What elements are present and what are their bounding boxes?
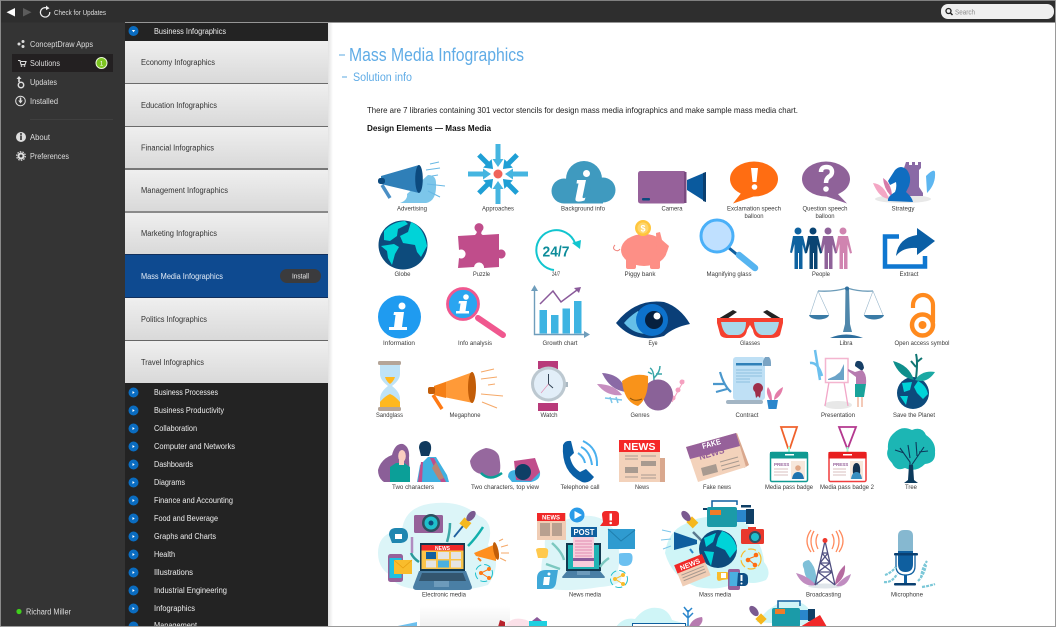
illustration: News media	[536, 508, 635, 598]
list header: Business Infographics	[128, 26, 226, 36]
user status: Richard Miller: Richard Miller	[26, 608, 71, 616]
list row: Management	[128, 621, 198, 627]
icon: Broadcasting	[796, 530, 851, 598]
list item: Travel Infographics	[125, 341, 328, 383]
camcorder	[703, 501, 754, 527]
icon: Approaches: Approaches	[482, 206, 515, 212]
laptop: NEWS	[435, 546, 451, 552]
icon: Advertising: Advertising	[397, 206, 427, 212]
list row: Industrial Engineering: Industrial Engineering	[154, 586, 227, 595]
icon: Megaphone	[428, 369, 503, 419]
list row: Business Productivity: Business Productivity	[154, 406, 224, 415]
icon: Camera: Camera	[662, 206, 683, 212]
microphone	[454, 509, 478, 537]
list item: Education Infographics	[125, 84, 328, 127]
icon: Two characters, top view: Two characters, top view	[471, 484, 539, 491]
nav item: ConceptDraw Apps: ConceptDraw Apps	[30, 40, 93, 49]
icon: Microphone: Microphone	[891, 592, 923, 598]
icon: Two characters: Two characters	[392, 484, 435, 491]
search box: Search	[955, 8, 975, 16]
camera	[414, 514, 443, 533]
icon: Libra	[809, 286, 884, 347]
icon: Exclamation speech balloon: balloon	[744, 213, 764, 220]
thumbs up bubble	[389, 528, 408, 543]
list row: Health: Health	[154, 550, 175, 559]
list row: Business Processes	[128, 388, 218, 398]
list item: Management Infographics	[125, 170, 328, 213]
icon: Media pass badge: Media pass badge	[765, 484, 813, 491]
caption: News media	[569, 592, 601, 598]
icon: Sandglass: Sandglass	[376, 412, 404, 419]
nav item: Preferences: Preferences	[30, 152, 69, 161]
leaves	[546, 543, 609, 569]
caption: Mass media	[699, 592, 731, 598]
microphone	[679, 509, 703, 542]
red camera	[741, 527, 764, 544]
icon: Media pass badge	[765, 427, 813, 491]
icon: Eye	[616, 301, 690, 347]
list header: Business Infographics: Business Infographics	[154, 27, 226, 36]
icon: Tree: Tree	[905, 484, 917, 491]
icon: 24/7: 24/7	[552, 271, 560, 278]
icon: Fake news: Fake news	[703, 484, 732, 491]
list item: Travel Infographics: Travel Infographics	[141, 358, 204, 367]
button: Check for Updates	[40, 6, 106, 17]
laptop with post	[562, 537, 605, 578]
intro paragraph: There are 7 libraries containing 301 vector stencils for design mass media infographics and make sample mass media chart.	[367, 105, 798, 115]
list item: Financial Infographics	[125, 127, 328, 170]
list row: Diagrams: Diagrams	[154, 478, 185, 487]
search box	[941, 4, 1054, 19]
icon: Puzzle	[458, 223, 506, 278]
list item: Marketing Infographics: Marketing Infographics	[141, 229, 217, 238]
icon: Media pass badge 2	[820, 427, 874, 491]
nav selected row: Solutions	[12, 54, 113, 72]
list row: Food and Beverage: Food and Beverage	[154, 514, 218, 523]
icon: Presentation	[810, 350, 866, 419]
nav item: Solutions: Solutions	[30, 59, 60, 68]
list row: Infographics	[128, 604, 195, 614]
icon: forward arrow	[23, 8, 32, 16]
megaphone	[474, 539, 509, 561]
icon: back arrow	[6, 8, 15, 16]
icon: Presentation: Presentation	[821, 412, 855, 419]
icon: Globe: Globe	[394, 271, 411, 278]
icon: Magnifying glass: Magnifying glass	[706, 271, 752, 278]
list item: Education Infographics: Education Infographics	[141, 101, 217, 110]
icon: Extract	[885, 228, 935, 278]
share icon	[610, 570, 628, 588]
icon: Two characters	[378, 441, 449, 491]
nav item: Installed: Installed	[30, 97, 58, 106]
phone and mail	[388, 554, 412, 582]
chart icon: Growth chart: Growth chart	[542, 340, 578, 347]
icon: Background info: Background info	[561, 206, 605, 212]
megaphone	[661, 530, 697, 553]
leaves	[411, 523, 483, 562]
icon: Fake news: NEWS	[698, 445, 726, 462]
icon: Approaches	[468, 144, 528, 212]
blue bubble	[619, 553, 633, 566]
section heading: Design Elements — Mass Media: Design Elements — Mass Media	[367, 123, 491, 133]
list item: Economy Infographics	[125, 41, 328, 84]
list item: Politics Infographics: Politics Infographics	[141, 315, 207, 324]
icon: Watch	[531, 361, 568, 419]
nav item: Preferences	[17, 152, 69, 161]
play button	[570, 508, 584, 522]
icon: Camera	[638, 171, 706, 212]
alert bubble	[600, 511, 619, 526]
icon: Question speech balloon	[802, 162, 850, 220]
icon: Piggy bank	[614, 220, 669, 278]
icon: Watch: Watch	[540, 412, 558, 419]
list row: Infographics: Infographics	[154, 604, 195, 613]
post label: POST	[574, 528, 595, 537]
list item selected: Mass Media Infographics	[125, 254, 328, 298]
list item: Financial Infographics: Financial Infographics	[141, 144, 214, 152]
next row: partially visible illustrations	[393, 601, 827, 627]
icon: Microphone	[884, 530, 935, 598]
list row: Illustrations: Illustrations	[154, 568, 193, 577]
list item: Management Infographics: Management Infographics	[141, 186, 228, 195]
icon: Open access symbol	[894, 295, 950, 347]
illustration: Electronic media	[378, 503, 509, 598]
icon: Genres	[597, 366, 684, 419]
thumb bubble	[717, 572, 730, 581]
icon: Contract: Contract	[736, 412, 759, 419]
nav item: About: About	[30, 133, 51, 142]
icon: Megaphone: Megaphone	[450, 412, 481, 419]
icon: Information: Information	[383, 340, 415, 347]
icon: Exclamation speech balloon: Exclamation speech	[727, 206, 781, 212]
icon: Save the Planet: Save the Planet	[893, 412, 935, 419]
icon: Save the Planet	[893, 354, 935, 419]
list row: Collaboration	[128, 424, 197, 434]
list item: Economy Infographics: Economy Infographics	[141, 58, 215, 67]
chart icon: Growth chart	[531, 285, 590, 347]
icon: 24/7: 24/7	[542, 244, 570, 260]
icon: People	[790, 228, 852, 278]
icon: Advertising	[378, 162, 445, 212]
icon: Libra: Libra	[840, 340, 853, 347]
list row: Health	[128, 550, 175, 560]
list row: Diagrams	[128, 478, 185, 488]
icon: Piggy bank: Piggy bank	[624, 271, 656, 278]
icon: Eye: Eye	[648, 340, 658, 347]
list item selected: Mass Media Infographics: Mass Media Infographics	[141, 272, 223, 281]
icon: Media pass badge: PRESS	[774, 462, 789, 467]
icon: Question speech balloon: Question speech	[802, 206, 848, 212]
nav item: Updates	[16, 76, 57, 88]
icon: Piggy bank: $	[640, 224, 646, 234]
icon: Open access symbol: Open access symbol	[894, 340, 950, 347]
icon: Glasses: Glasses	[740, 340, 760, 347]
newspaper: NEWS	[679, 558, 702, 572]
button: Install	[280, 269, 321, 283]
newspaper: NEWS	[542, 516, 560, 522]
icon: Media pass badge 2: Media pass badge 2	[820, 484, 874, 491]
list row: Finance and Accounting	[128, 496, 233, 506]
panel: solutions list	[125, 23, 328, 627]
list row: Computer and Networks	[128, 442, 235, 452]
list row: Graphs and Charts	[128, 532, 216, 542]
icon: People: People	[812, 271, 830, 278]
list row: Food and Beverage	[128, 514, 218, 524]
list row: Business Productivity	[128, 406, 224, 416]
icon: Info analysis: Info analysis	[458, 340, 493, 347]
illustration: Mass media	[661, 501, 769, 598]
icon: News	[619, 440, 665, 491]
info bubble	[537, 570, 558, 589]
button: Check for Updates: Check for Updates	[54, 8, 106, 17]
panel: top toolbar	[0, 0, 1056, 22]
list row: Computer and Networks: Computer and Networks	[154, 442, 235, 451]
phone	[728, 569, 748, 590]
caption: Electronic media	[422, 592, 466, 598]
icon: Strategy: Strategy	[892, 206, 915, 212]
list row: Dashboards	[128, 460, 193, 470]
icon: Two characters, top view	[470, 448, 540, 491]
share icon	[741, 549, 761, 569]
icon: Fake news	[686, 433, 749, 491]
list row: Graphs and Charts: Graphs and Charts	[154, 532, 216, 541]
list row: Business Processes: Business Processes	[154, 388, 218, 397]
icon: Broadcasting: Broadcasting	[806, 592, 841, 598]
icon: Background info	[552, 161, 616, 212]
list row: Illustrations	[128, 568, 193, 578]
badge: solutions count	[96, 58, 107, 68]
list item: Marketing Infographics	[125, 213, 328, 254]
icon: News: NEWS	[624, 442, 656, 453]
icon: Globe	[378, 220, 428, 278]
list row: Finance and Accounting: Finance and Accounting	[154, 496, 233, 505]
panel: left navigation sidebar	[0, 22, 125, 627]
icon: Strategy	[873, 162, 935, 212]
icon: Question speech balloon: balloon	[816, 213, 835, 220]
button: Install: Install	[292, 274, 309, 280]
nav item: About	[16, 132, 51, 142]
icon: Contract	[713, 357, 783, 419]
nav item: Solutions	[18, 59, 60, 68]
icon: Genres: Genres	[630, 412, 650, 419]
list row: Dashboards: Dashboards	[154, 460, 193, 469]
globe	[699, 530, 737, 568]
list row: Collaboration: Collaboration	[154, 424, 197, 433]
icon: News: News	[635, 484, 649, 491]
list row: Industrial Engineering	[128, 586, 227, 596]
nav item: Installed	[16, 96, 58, 106]
icon: Puzzle: Puzzle	[473, 271, 490, 278]
share icon	[476, 564, 492, 582]
icon: Tree	[887, 428, 935, 491]
badge: solutions count: 1	[100, 62, 104, 68]
icon: Extract: Extract	[900, 271, 919, 278]
icon: Info analysis	[448, 288, 503, 347]
icon: Magnifying glass	[701, 220, 755, 278]
icon: 24/7	[536, 230, 581, 278]
subheading: Solution info: Solution info	[353, 72, 412, 84]
icon: Telephone call: Telephone call	[560, 484, 600, 491]
icon: Media pass badge 2: PRESS	[833, 462, 848, 467]
heading: Mass Media Infographics: Mass Media Infographics	[349, 45, 524, 65]
envelope	[608, 529, 635, 549]
nav item: Updates: Updates	[30, 78, 57, 87]
icon: Information	[378, 296, 421, 347]
icon: Sandglass	[376, 361, 404, 419]
icon: Fake news: FAKE	[701, 437, 722, 451]
icon: Exclamation speech balloon	[727, 162, 781, 220]
icon: Telephone call	[560, 441, 600, 491]
list item: Politics Infographics	[125, 298, 328, 341]
yellow bubble	[536, 548, 548, 558]
icon: Glasses	[717, 310, 783, 347]
